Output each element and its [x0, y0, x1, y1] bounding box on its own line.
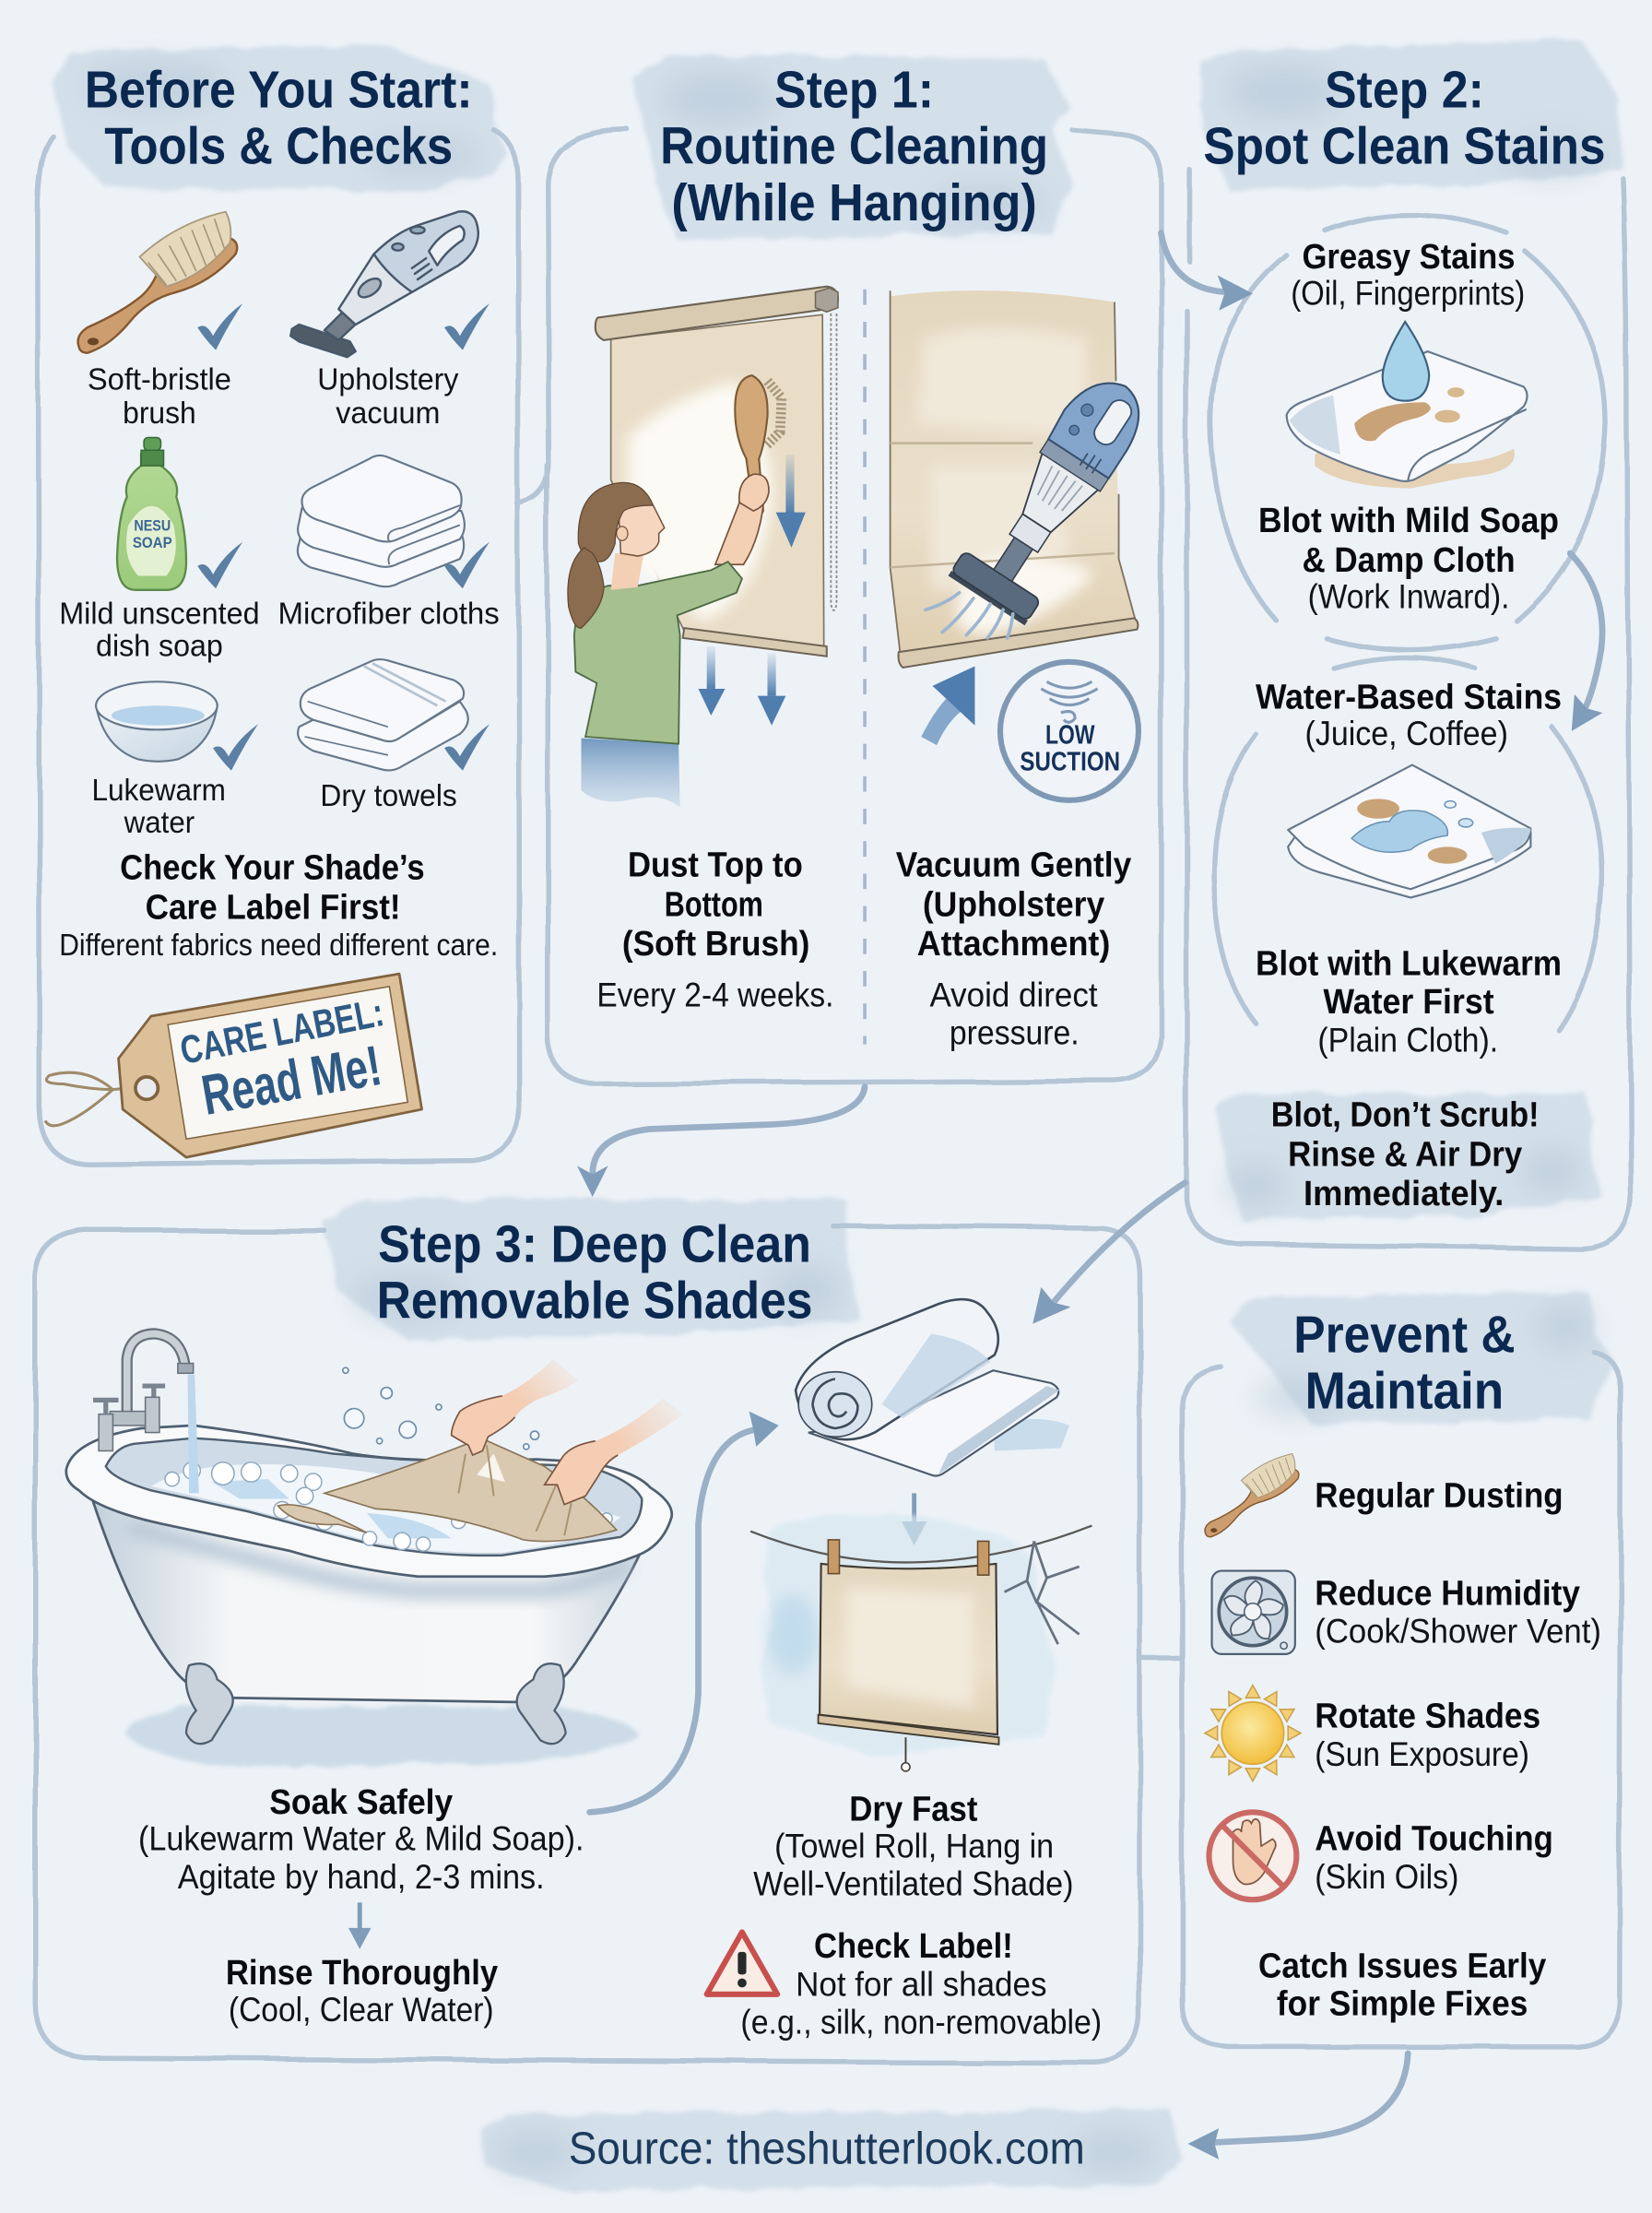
text: rotate shades: Rotate Shades	[1315, 1696, 1540, 1735]
label: dish soap	[59, 598, 260, 664]
text: avoid touching: (Skin Oils)	[1315, 1858, 1458, 1896]
text: blot with mild soap: (Work Inward).	[1308, 578, 1509, 616]
label: soft-bristle brush: brush	[123, 396, 196, 431]
text: dust top to bottom: Dust Top to	[628, 846, 803, 885]
icon: dry towels	[298, 659, 468, 770]
callout: blot, don't scrub: Immediately.	[1304, 1174, 1504, 1213]
text: reduce humidity: (Cook/Shower Vent)	[1315, 1613, 1601, 1651]
text: reduce humidity	[1315, 1573, 1601, 1651]
illustration: clawfoot bathtub	[66, 1333, 672, 1767]
check mark: bowl	[213, 724, 258, 771]
icon: care label tag: CARE LABEL:	[177, 990, 387, 1073]
icon: do not touch	[1209, 1812, 1296, 1899]
text: blot with mild soap: Blot with Mild Soap	[1258, 501, 1559, 540]
illustration: roman shade	[891, 290, 1138, 668]
icon: dish soap bottle: SOAP	[133, 534, 172, 551]
heading: prevent and maintain	[1293, 1305, 1516, 1420]
icon: air flow lines	[926, 593, 1013, 638]
text: avoid touching: Avoid Touching	[1315, 1819, 1553, 1859]
label: lukewarm water: water	[124, 806, 195, 840]
heading: step 2: Step 2:	[1325, 60, 1484, 118]
arrow: towel to hanging	[902, 1493, 926, 1545]
arrow: step 1 to step 3	[577, 1087, 865, 1197]
text: vacuum gently: (Upholstery	[923, 884, 1105, 924]
text: rotate shades: (Sun Exposure)	[1315, 1735, 1529, 1773]
text: soak safely: (Lukewarm Water & Mild Soap).	[138, 1820, 584, 1858]
text: water-based stains: (Juice, Coffee)	[1305, 715, 1508, 752]
panel: deep clean	[66, 1299, 1102, 2041]
illustration: water stained cloth	[1288, 765, 1530, 897]
check mark: cloths	[444, 542, 490, 588]
heading: step 1	[660, 60, 1048, 231]
heading: prevent and maintain: Maintain	[1305, 1362, 1504, 1420]
text: blot with mild soap	[1258, 501, 1559, 616]
text: vacuum gently: Avoid direct	[929, 976, 1098, 1013]
source line: Source: theshutterlook.com	[569, 2124, 1085, 2173]
text: vacuum gently: Vacuum Gently	[896, 846, 1132, 885]
heading: step 1: Routine Cleaning	[660, 117, 1048, 175]
check mark: soap	[197, 542, 242, 588]
heading: before you start	[85, 60, 473, 175]
arrow: soak to rinse	[348, 1902, 371, 1949]
label: upholstery vacuum: vacuum	[336, 396, 440, 431]
illustration: blue handheld vacuum	[949, 361, 1163, 625]
icon: dish soap bottle	[117, 437, 186, 590]
text: rinse thoroughly: Rinse Thoroughly	[226, 1953, 499, 1993]
arrow: step 1 to step 2	[1161, 233, 1253, 311]
heading: step 1: Step 1:	[774, 60, 934, 118]
icon: microfiber cloths	[298, 456, 465, 586]
text: water-based stains: Water-Based Stains	[1256, 677, 1562, 716]
text: dust top to bottom	[596, 846, 833, 1013]
arrow: soak to towel	[590, 1412, 779, 1812]
icon: soft-bristle brush	[78, 212, 237, 353]
text: blot with lukewarm water: Water First	[1323, 982, 1494, 1022]
heading: step 2: Spot Clean Stains	[1203, 117, 1605, 175]
label: lukewarm water: Lukewarm	[91, 774, 226, 808]
text: catch issues early	[1258, 1946, 1547, 2024]
icon: small brush	[1205, 1454, 1299, 1537]
panel: spot clean stains	[1256, 237, 1562, 1213]
callout: blot, don't scrub	[1271, 1095, 1540, 1213]
text: greasy stains: Greasy Stains	[1302, 237, 1516, 277]
icon: sun	[1205, 1686, 1301, 1781]
check mark: vacuum	[444, 303, 490, 350]
heading: before you start: Tools & Checks	[104, 117, 453, 175]
text: dust top to bottom: Every 2-4 weeks.	[596, 976, 833, 1013]
text: avoid touching	[1315, 1819, 1553, 1896]
text: dry fast: (Towel Roll, Hang in	[774, 1827, 1054, 1864]
text: vacuum gently: pressure.	[950, 1014, 1080, 1052]
text: vacuum gently	[896, 846, 1132, 1052]
icon: wooden brush on shade	[735, 375, 782, 515]
heading: step 2	[1203, 60, 1605, 175]
text: check label warning: Not for all shades	[796, 1965, 1046, 2003]
badge: low suction: LOW	[1045, 721, 1095, 751]
panel: tools and checks	[45, 211, 500, 1157]
text: dry fast	[753, 1789, 1074, 1903]
heading: prevent and maintain: Prevent &	[1293, 1305, 1516, 1363]
text: catch issues early: for Simple Fixes	[1277, 1984, 1528, 2024]
label: soft-bristle brush: Soft-bristle	[88, 362, 231, 396]
text: check label warning	[740, 1926, 1102, 2041]
badge: low suction	[1000, 662, 1139, 800]
check mark: brush	[197, 303, 242, 350]
text: check label warning: Check Label!	[814, 1926, 1013, 1966]
icon: warning triangle	[707, 1932, 777, 1994]
text: dust top to bottom: Bottom	[665, 884, 763, 924]
heading: step 3: Removable Shades	[377, 1272, 812, 1330]
text: check care label: Check Your Shade’s	[120, 848, 425, 888]
arrow: curved blue arrow	[921, 666, 974, 745]
text: regular dusting: Regular Dusting	[1315, 1476, 1564, 1516]
heading: before you start: Before You Start:	[85, 60, 473, 118]
text: check care label: Care Label First!	[146, 887, 401, 927]
text: rinse thoroughly: (Cool, Clear Water)	[229, 1991, 494, 2029]
text: soak safely: Soak Safely	[269, 1782, 454, 1822]
icon: care label tag: Read Me!	[197, 1034, 386, 1127]
text: blot with mild soap: & Damp Cloth	[1302, 540, 1516, 580]
panel: prevent and maintain	[1205, 1454, 1601, 2024]
icon: vent fan	[1212, 1571, 1295, 1654]
icon: upholstery vacuum	[290, 211, 478, 357]
text: vacuum gently: Attachment)	[917, 924, 1110, 964]
arrow: prevent to source	[1188, 2053, 1408, 2160]
text: dry fast: Well-Ventilated Shade)	[753, 1865, 1074, 1903]
text: blot with lukewarm water: Blot with Lukewarm	[1256, 944, 1562, 984]
icon: dish soap bottle: NESU	[134, 517, 171, 535]
arrow: greasy to water-based	[1570, 553, 1602, 731]
text: water-based stains	[1256, 677, 1562, 752]
text: rotate shades	[1315, 1696, 1540, 1773]
illustration: towel roll	[796, 1299, 1069, 1476]
heading: step 1: (While Hanging)	[671, 173, 1037, 231]
arrow: step 2 to step 3	[1032, 1183, 1185, 1324]
callout: blot, don't scrub: Blot, Don’t Scrub!	[1271, 1095, 1540, 1134]
label: microfiber cloths: Microfiber cloths	[277, 598, 500, 632]
text: reduce humidity: Reduce Humidity	[1315, 1573, 1581, 1613]
text: dry fast: Dry Fast	[849, 1789, 978, 1828]
label: dish soap: Mild unscented	[59, 598, 260, 632]
text: check label warning: (e.g., silk, non-removable)	[740, 2004, 1102, 2041]
illustration: greasy cloth with water drop	[1287, 322, 1528, 489]
text: greasy stains	[1291, 237, 1525, 313]
illustration: dusting roller shade	[596, 287, 838, 657]
label: soft-bristle brush	[88, 362, 231, 431]
label: upholstery vacuum: Upholstery	[317, 362, 459, 396]
text: catch issues early: Catch Issues Early	[1258, 1946, 1547, 1985]
icon: lukewarm water bowl	[96, 681, 218, 762]
label: dry towels: Dry towels	[320, 779, 457, 813]
text: check care label: Different fabrics need different care.	[59, 929, 498, 963]
badge: low suction: SUCTION	[1020, 748, 1120, 777]
callout: blot, don't scrub: Rinse & Air Dry	[1288, 1134, 1523, 1174]
label: dish soap: dish soap	[96, 630, 223, 664]
arrow: dust falling left	[699, 646, 726, 716]
text: dust top to bottom: (Soft Brush)	[622, 924, 809, 964]
text: greasy stains: (Oil, Fingerprints)	[1291, 275, 1525, 313]
arrow: dust falling right	[758, 654, 785, 726]
heading: step 3: Step 3: Deep Clean	[378, 1214, 811, 1272]
illustration: shade hanging on line	[750, 1514, 1092, 1771]
panel: routine cleaning	[568, 287, 1163, 1052]
text: blot with lukewarm water	[1256, 944, 1562, 1059]
text: soak safely: Agitate by hand, 2-3 mins.	[178, 1858, 545, 1896]
icon: care label tag	[45, 974, 422, 1157]
text: check care label	[59, 848, 498, 963]
arrow: dust downward on shade	[776, 455, 806, 548]
dashed divider	[864, 290, 866, 1045]
text: soak safely	[138, 1782, 584, 1896]
illustration: woman dusting	[568, 474, 769, 808]
heading: step 3	[377, 1214, 812, 1330]
check mark: towels	[444, 724, 490, 771]
text: blot with lukewarm water: (Plain Cloth).	[1317, 1021, 1498, 1059]
illustration: hands and bubbles	[343, 1359, 684, 1505]
text: rinse thoroughly	[226, 1953, 499, 2029]
label: upholstery vacuum	[317, 362, 459, 431]
label: lukewarm water	[91, 774, 226, 840]
